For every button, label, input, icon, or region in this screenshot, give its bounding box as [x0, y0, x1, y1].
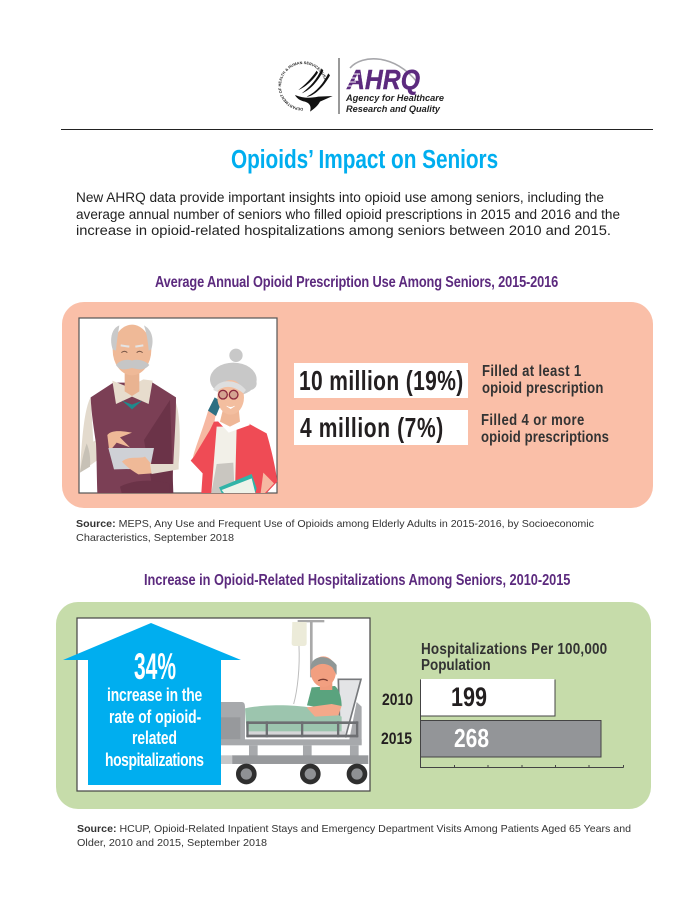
bar: 2015: 268	[454, 725, 489, 753]
callout: 34% increase arrow: rate of opioid-	[109, 707, 201, 728]
agency name: Agency for Healthcare	[345, 93, 445, 104]
intro paragraph	[76, 190, 620, 238]
callout: 34% increase arrow: 34%	[134, 646, 176, 687]
illustration: patient in hospital bed	[77, 618, 370, 791]
title: Opioids’ Impact on Seniors	[231, 145, 498, 174]
woman	[193, 410, 217, 470]
intro paragraph: average annual number of seniors who filled opioid prescriptions in 2015 and 2016 and the	[76, 207, 620, 222]
illustration: senior couple	[79, 318, 277, 493]
source: HCUP: Source: HCUP, Opioid-Related Inpatient Stays and Emergency Department Visits Among Patients Aged 65 Years and	[77, 824, 631, 835]
source: MEPS: Characteristics, September 2018	[76, 533, 234, 544]
heading: hospitalizations: Increase in Opioid-Related Hospitalizations Among Seniors, 2010-2015	[144, 572, 570, 589]
man	[80, 397, 109, 473]
panel: hospitalizations	[56, 602, 651, 809]
panel: prescription use	[62, 302, 653, 508]
AHRQ wordmark: AHRQ	[346, 64, 420, 95]
bar: 2015	[381, 720, 601, 757]
chart heading	[421, 641, 607, 674]
stat: filled at least 1: opioid prescription	[482, 380, 603, 397]
bar: 2010	[382, 679, 555, 716]
bar: 2010: 199	[451, 682, 487, 712]
stat: 10 million: 10 million (19%)	[299, 366, 463, 397]
heading: prescription use: Average Annual Opioid Prescription Use Among Seniors, 2015-2016	[155, 274, 558, 291]
intro paragraph: increase in opioid-related hospitalizations among seniors between 2010 and 2015.	[76, 223, 611, 238]
callout: 34% increase arrow: increase in the	[107, 685, 202, 706]
callout: 34% increase arrow: related	[132, 728, 177, 749]
callout: 34% increase arrow	[63, 623, 241, 785]
callout: 34% increase arrow: hospitalizations	[105, 750, 204, 771]
source: MEPS: Source: MEPS, Any Use and Frequent Use of Opioids among Elderly Adults in 2015-2016, by Socioeconomic	[76, 519, 594, 530]
source: HCUP	[77, 824, 631, 849]
chart heading: Hospitalizations Per 100,000	[421, 641, 607, 658]
bar chart	[381, 679, 624, 768]
stat: 4 million: 4 million (7%)	[300, 413, 443, 444]
stat: filled at least 1	[482, 363, 603, 397]
stat: filled 4 or more: opioid prescriptions	[481, 429, 609, 446]
divider	[338, 58, 340, 114]
icon: HHS seal: DEPARTMENT OF HEALTH & HUMAN SERVICES USA	[278, 61, 326, 111]
source: MEPS	[76, 519, 594, 544]
chart heading: Population	[421, 657, 491, 674]
logo: HHS and AHRQ	[278, 58, 445, 115]
stat: filled at least 1: Filled at least 1	[482, 363, 581, 380]
intro paragraph: New AHRQ data provide important insights into opioid use among seniors, including the	[76, 190, 604, 205]
source: HCUP: Older, 2010 and 2015, September 2018	[77, 838, 267, 849]
header rule	[61, 129, 653, 130]
logo: HHS and AHRQ: Research and Quality	[346, 104, 441, 115]
stat: filled 4 or more: Filled 4 or more	[481, 412, 584, 429]
bar: 2010: 2010	[382, 690, 413, 709]
bar: 2015: 2015	[381, 729, 412, 748]
stat: filled 4 or more	[481, 412, 609, 446]
